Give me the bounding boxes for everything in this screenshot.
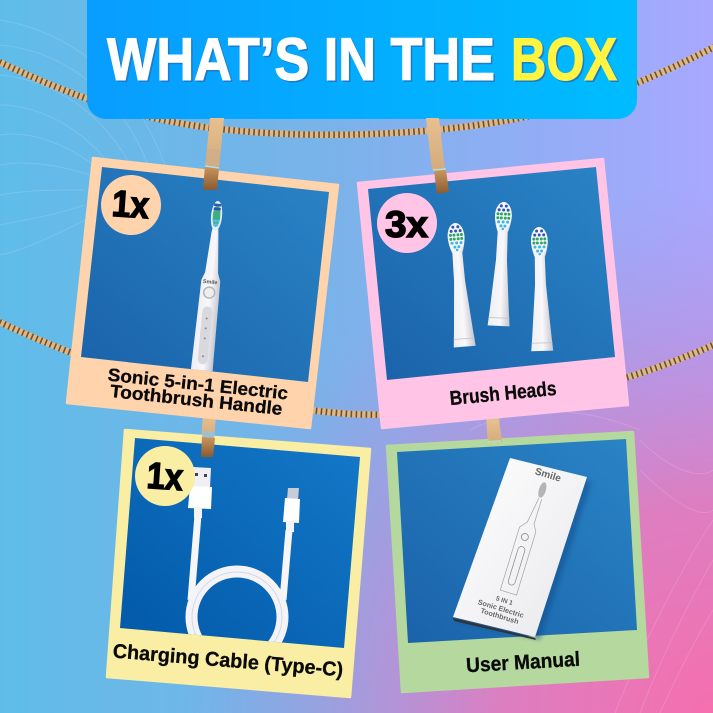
panel: user manual bbox=[387, 420, 648, 692]
icon: toothbrush: Smile bbox=[203, 279, 218, 286]
title: BOX bbox=[511, 26, 617, 93]
badge: 3x: 3x bbox=[385, 204, 428, 245]
title: WHAT’S IN THE bbox=[107, 26, 495, 93]
clothespin bbox=[203, 118, 224, 190]
badge: 1x: 1x bbox=[111, 183, 151, 226]
icon: cable bbox=[188, 467, 300, 662]
icon: brush head left bbox=[444, 222, 476, 347]
title: BOX bbox=[512, 28, 618, 94]
clothespin bbox=[487, 420, 502, 443]
caption bbox=[105, 365, 289, 419]
icon: manual booklet: Smile bbox=[533, 466, 563, 485]
icon: brush head right bbox=[528, 227, 553, 351]
clothespin bbox=[201, 431, 215, 457]
caption: Brush Heads bbox=[449, 378, 557, 410]
clothespin stub: behind card 3 top bbox=[201, 415, 216, 440]
rope: bottom bbox=[0, 320, 713, 415]
icon: manual booklet: 5 IN 1 bbox=[495, 595, 514, 607]
caption: User Manual bbox=[465, 648, 581, 677]
badge: 3x bbox=[377, 193, 437, 253]
badge: 1x bbox=[101, 175, 161, 235]
panel: charging cable bbox=[107, 430, 370, 697]
title: WHAT’S IN THE bbox=[108, 28, 496, 94]
caption: Sonic 5-in-1 Electric bbox=[107, 365, 289, 403]
clothespin bbox=[426, 118, 449, 194]
icon: manual booklet: Sonic Electric bbox=[477, 597, 525, 620]
header banner bbox=[87, 0, 637, 119]
caption: Toothbrush Handle bbox=[109, 381, 283, 419]
badge: 1x bbox=[135, 446, 195, 506]
clothespin stub: behind card 4 top bbox=[486, 415, 501, 447]
panel: toothbrush handle bbox=[67, 118, 338, 428]
badge: 1x: 1x bbox=[146, 455, 185, 498]
icon: toothbrush bbox=[190, 201, 222, 372]
icon: manual booklet: Toothbrush bbox=[480, 606, 520, 626]
icon: brush head centre bbox=[488, 202, 515, 326]
icon: manual booklet bbox=[453, 458, 592, 640]
rope: top bbox=[0, 44, 713, 135]
caption: Charging Cable (Type-C) bbox=[112, 641, 344, 681]
panel: brush heads bbox=[358, 118, 628, 428]
